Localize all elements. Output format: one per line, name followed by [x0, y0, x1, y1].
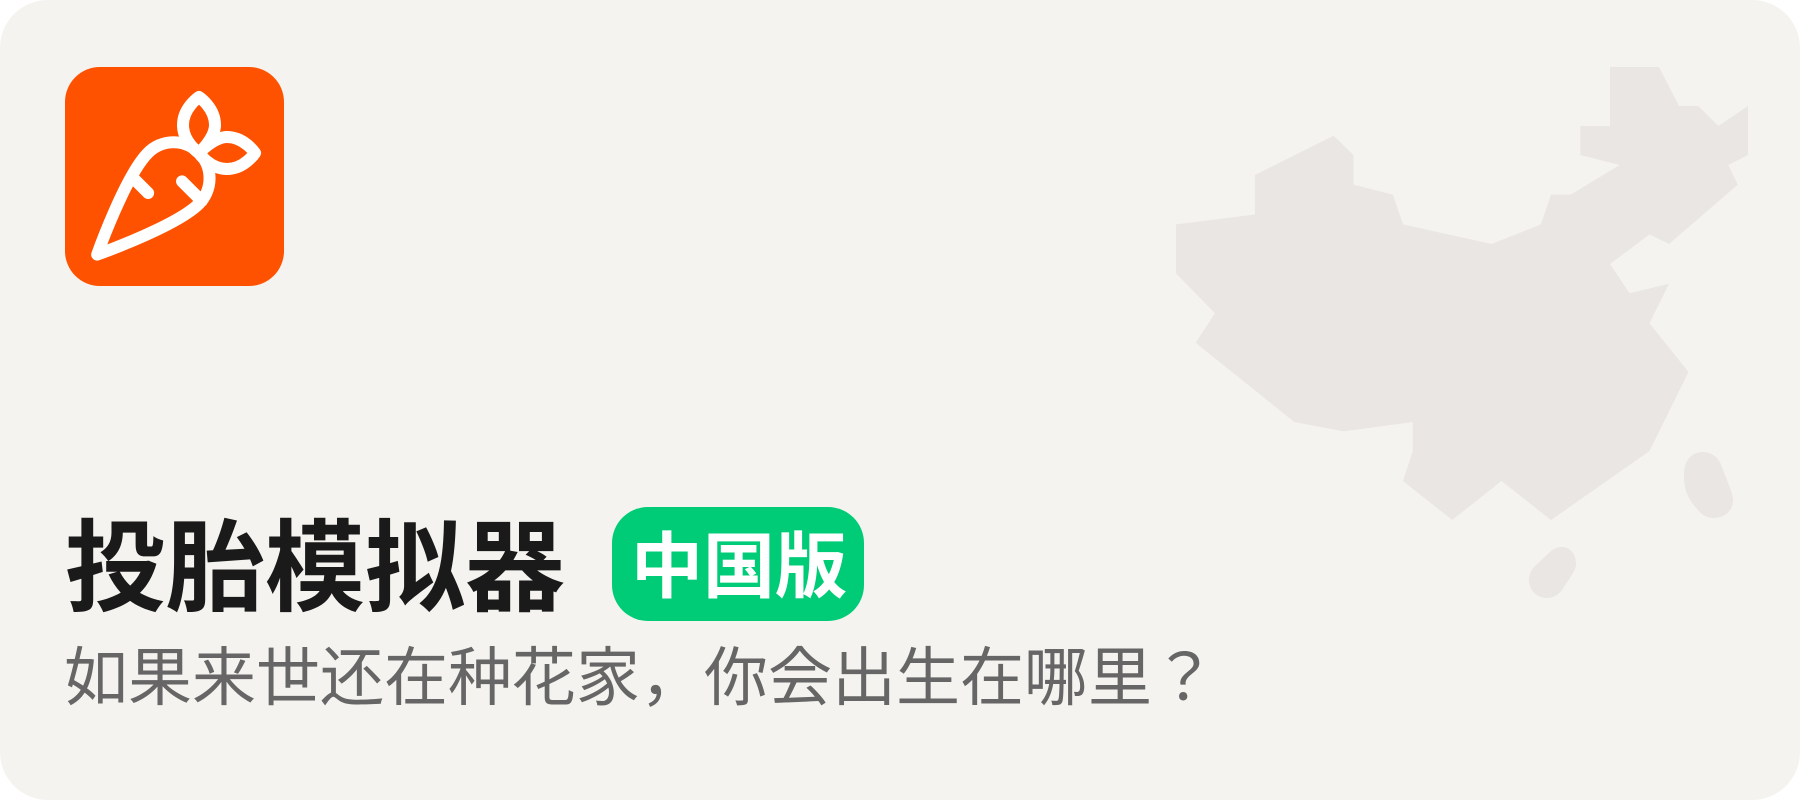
mainland [1176, 67, 1748, 520]
island: Taiwan [1684, 452, 1733, 518]
title: 投胎模拟器 [65, 513, 565, 625]
badge: China edition [612, 507, 864, 621]
badge: China edition: 中国版 [631, 528, 847, 608]
icon: carrot [91, 90, 262, 261]
island: Hainan [1529, 547, 1576, 598]
subtitle: 如果来世还在种花家，你会出生在哪里？ [64, 642, 1216, 714]
icon: orange app tile with carrot [65, 67, 284, 286]
